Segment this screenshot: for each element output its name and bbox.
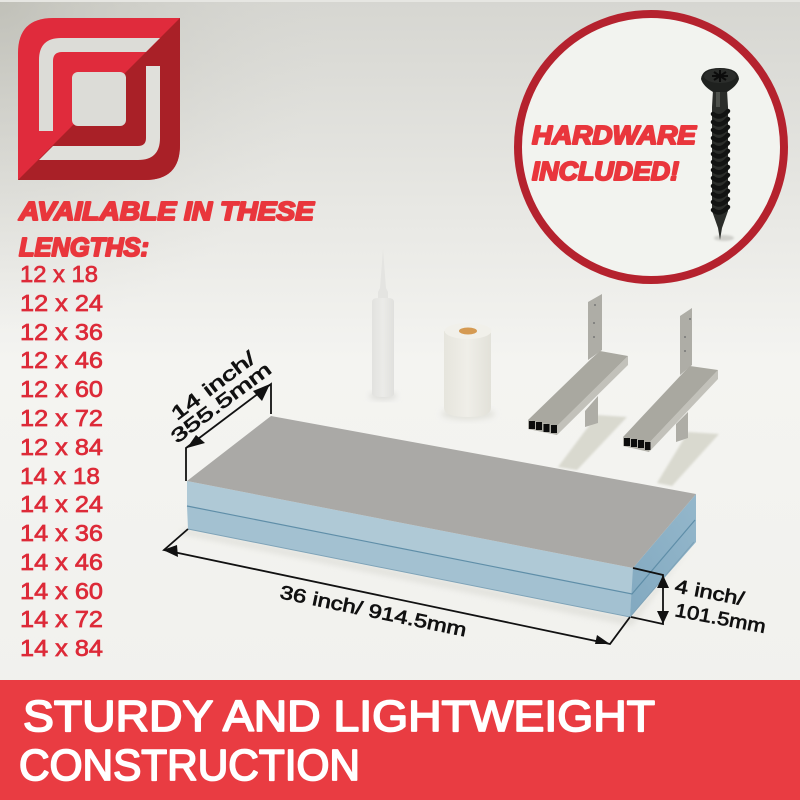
dimension: length 36 inch	[163, 529, 630, 644]
list of lengths	[20, 261, 103, 661]
list of lengths: 14 x 46	[20, 549, 103, 575]
dimension: length 36 inch: 36 inch/ 914.5mm	[278, 582, 468, 641]
banner	[0, 680, 800, 800]
callout: hardware included: INCLUDED!	[532, 156, 679, 186]
dimension: height 4 inch	[631, 568, 767, 638]
list of lengths: 12 x 18	[20, 261, 98, 287]
icon: metal bracket 2	[623, 308, 719, 486]
banner: CONSTRUCTION	[19, 741, 360, 790]
dimension: height 4 inch: 101.5mm	[673, 600, 767, 638]
list of lengths: 14 x 60	[20, 578, 103, 604]
list of lengths: 12 x 60	[20, 376, 103, 402]
icon: metal bracket 1	[528, 294, 628, 470]
icon: sealant cartridge	[369, 249, 397, 400]
list of lengths: 12 x 72	[20, 405, 103, 431]
list of lengths: 14 x 84	[20, 635, 103, 661]
list of lengths: 12 x 84	[20, 434, 103, 460]
list of lengths: 12 x 24	[20, 290, 103, 316]
list of lengths: 14 x 36	[20, 520, 103, 546]
list of lengths: 12 x 36	[20, 319, 103, 345]
dimension: width 14 inch	[167, 347, 276, 481]
list of lengths: 14 x 18	[20, 463, 100, 489]
dimension: width 14 inch: 14 inch/	[167, 347, 261, 425]
heading: available lengths: LENGTHS:	[19, 232, 149, 262]
heading: available lengths: AVAILABLE IN THESE	[18, 196, 315, 226]
logo	[18, 18, 180, 180]
dimension: width 14 inch: 355.5mm	[167, 359, 276, 448]
icon: screw	[701, 68, 739, 241]
icon: adhesive roll	[441, 323, 495, 420]
list of lengths: 14 x 72	[20, 606, 103, 632]
callout: hardware included	[518, 14, 784, 280]
banner: STURDY AND LIGHTWEIGHT	[23, 692, 655, 741]
list of lengths: 12 x 46	[20, 347, 103, 373]
list of lengths: 14 x 24	[20, 491, 103, 517]
callout: hardware included: HARDWARE	[532, 120, 697, 150]
shelf panel	[176, 416, 696, 626]
dimension: height 4 inch: 4 inch/	[673, 576, 747, 610]
heading: available lengths	[18, 196, 315, 262]
